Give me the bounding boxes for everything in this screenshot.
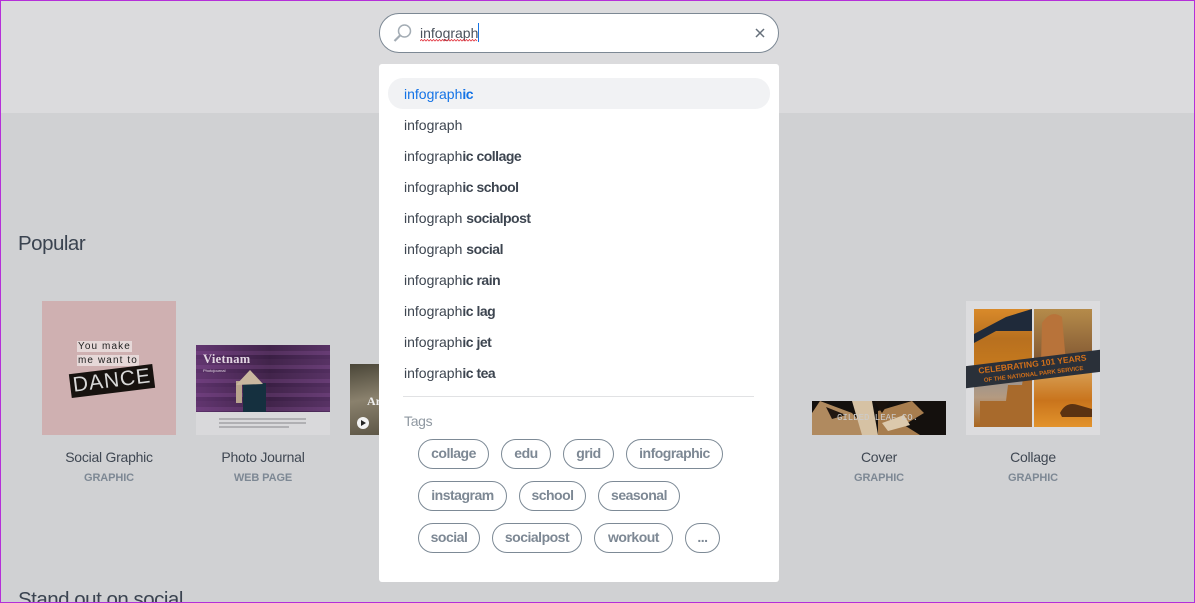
sublabel: GRAPHIC: GRAPHIC: [84, 472, 134, 484]
thumbnail: social graphic: [42, 301, 176, 435]
icon: magnifier: [394, 24, 412, 42]
suggestion: infographic rain: infographic rain: [404, 272, 500, 288]
collage banner: CELEBRATING 101 YEARS: [978, 352, 1087, 376]
tag: school: [519, 481, 586, 511]
tag: edu: [501, 439, 551, 469]
tag: instagram: instagram: [431, 487, 494, 503]
tag: seasonal: seasonal: [611, 487, 667, 503]
cover text: GILDED LEAF CO.: [837, 413, 918, 423]
thumbnail text: You make me want to: [77, 341, 139, 366]
tag: social: [418, 523, 480, 553]
suggestion: infograph social: infograph social: [404, 241, 503, 257]
label: Cover: Cover: [861, 449, 897, 465]
suggestion: infograph socialpost: infograph socialpost: [404, 210, 531, 226]
sublabel: GRAPHIC: GRAPHIC: [1008, 472, 1058, 484]
thumbnail text: DANCE: DANCE: [72, 364, 152, 397]
icon: clear x: [756, 28, 764, 38]
label: Collage: Collage: [1010, 449, 1056, 465]
tag: infographic: [626, 439, 723, 469]
thumbnail text: You make me want to: You make: [78, 341, 131, 352]
suggestion: infographic collage: infographic collage: [404, 148, 521, 164]
section heading: Popular: Popular: [18, 232, 85, 255]
tag: instagram: [418, 481, 507, 511]
thumbnail: cover: [812, 401, 946, 435]
collage photos: [974, 309, 1092, 427]
tag: collage: collage: [431, 445, 476, 461]
cover photo: [812, 401, 924, 435]
tag: edu: edu: [514, 445, 538, 461]
sublabel: GRAPHIC: GRAPHIC: [854, 472, 904, 484]
suggestion: infographic school: infographic school: [404, 179, 519, 195]
tag: workout: [594, 523, 673, 553]
spelling squiggle: [420, 39, 478, 42]
tag: socialpost: socialpost: [505, 529, 569, 545]
text caret: [478, 23, 479, 42]
collage banner: OF THE NATIONAL PARK SERVICE: [984, 366, 1084, 384]
tag: grid: [563, 439, 614, 469]
figure in hat: [236, 370, 266, 412]
sublabel: WEB PAGE: WEB PAGE: [234, 472, 292, 484]
top header band: [0, 0, 1195, 113]
suggestion: infographic jet: infographic jet: [404, 334, 491, 350]
suggestion: infographic tea: infographic tea: [404, 365, 495, 381]
tag: seasonal: [598, 481, 680, 511]
tag: workout: workout: [608, 529, 659, 545]
suggestion: infographic lag: infographic lag: [404, 303, 495, 319]
highlighted suggestion background: [388, 78, 770, 109]
tag: school: school: [531, 487, 574, 503]
label: Social Graphic: Social Graphic: [65, 449, 153, 465]
label: Photo Journal: Photo Journal: [221, 449, 305, 465]
photo area: [196, 345, 330, 412]
search box: [379, 13, 779, 53]
collage banner: [961, 349, 1105, 389]
thumbnail: photo journal: [196, 345, 330, 435]
suggestion: infographic: infographic: [404, 86, 473, 102]
page text lines: [219, 418, 306, 420]
thumbnail: collage: [966, 301, 1100, 435]
suggestions dropdown: [379, 64, 779, 582]
tag: collage: [418, 439, 489, 469]
photo title: Vietnam: Vietnam: [203, 352, 250, 366]
photo subtitle: Photojournal: [203, 368, 225, 373]
thumbnail text: You make me want to: me want to: [78, 355, 138, 366]
tag: socialpost: [492, 523, 582, 553]
icon: play button: [357, 417, 369, 429]
search input text: infograph: [420, 25, 478, 41]
thumbnail: partly hidden video: [350, 364, 379, 435]
tags heading: Tags: [404, 413, 432, 429]
suggestion: infograph: infograph: [404, 117, 462, 133]
tag: social: social: [431, 529, 467, 545]
tag: more: [685, 523, 720, 553]
tag: infographic: infographic: [639, 445, 710, 461]
tag: more: ...: [697, 529, 708, 545]
tag: grid: grid: [576, 445, 601, 461]
